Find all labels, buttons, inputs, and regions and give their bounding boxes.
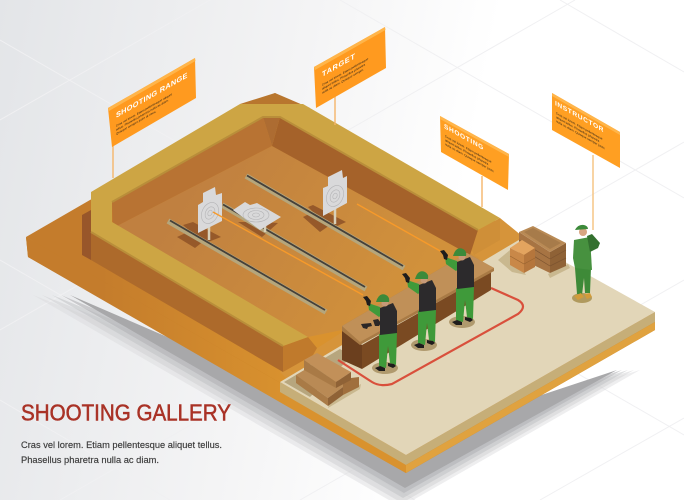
sign: shooting: nulla ac diam. Quisque semper justo.: [445, 142, 494, 174]
inner wall corner facet: [263, 117, 280, 146]
sign: shooting: Cras vel lorem. Etiam pellentesque: [445, 134, 492, 164]
shooting counter: [342, 253, 494, 369]
title: SHOOTING GALLERY: [21, 400, 231, 426]
soldier 1: [363, 294, 398, 374]
sign: shooting range: SHOOTING RANGE: [116, 70, 188, 120]
target 2: [233, 202, 281, 232]
sign: shooting range: Cras vel lorem. Etiam pellentesque aliquet: [116, 92, 172, 128]
sign: shooting range: Quisque semper justo at risus.: [116, 109, 156, 136]
sign: instructor: aliquet tellus. Phasellus pharetra: [556, 115, 599, 143]
sign: shooting: [440, 116, 509, 207]
wall top ring: [91, 104, 500, 346]
sign: shooting range: [108, 58, 196, 178]
wall: outer faces: [82, 210, 500, 372]
rail 2: [222, 204, 366, 289]
target 1: [198, 187, 222, 240]
sign: instructor: Cras vel lorem. Etiam pellentesque: [556, 111, 603, 141]
soldier 3: [440, 248, 475, 328]
sign: target: nulla ac diam. Quisque semper.: [322, 67, 364, 95]
laser line 1: [213, 212, 363, 295]
sign: shooting: SHOOTING: [444, 122, 484, 152]
sign: target: aliquet tellus. Phasellus pharetra: [322, 63, 365, 91]
sign: target: TARGET: [322, 51, 355, 79]
sign: instructor: INSTRUCTOR: [555, 99, 604, 134]
description: Phasellus pharetra nulla ac diam.: [21, 455, 159, 465]
inner wall right: [272, 117, 478, 255]
instructor: [572, 225, 600, 303]
pistols on counter: [361, 319, 381, 329]
crates near instructor: [498, 226, 570, 278]
inner wall left: [112, 117, 272, 228]
ground shadow: [33, 295, 640, 500]
sign: instructor: [552, 93, 620, 230]
sign: target: [314, 27, 386, 125]
sign: shooting: aliquet tellus. Phasellus pharetra: [445, 138, 488, 166]
soldier 2: [402, 271, 437, 351]
rail 3: [246, 176, 404, 268]
target 3: [323, 170, 347, 224]
beige slab: [280, 238, 655, 473]
range floor: [113, 146, 480, 337]
sign: instructor: nulla ac diam. Quisque semper justo.: [556, 119, 605, 151]
sign: shooting range: tellus. Phasellus pharetra nulla ac diam.: [116, 98, 169, 132]
red floor line: [338, 288, 523, 385]
laser line 2: [357, 204, 442, 252]
crates at counter: [296, 353, 361, 408]
target shadows: [177, 205, 346, 248]
sign: target: Cras vel lorem. Etiam pellentesque: [322, 57, 368, 87]
description: [21, 440, 222, 465]
orange ground strip: [280, 218, 540, 392]
platform base: [26, 93, 655, 473]
description: Cras vel lorem. Etiam pellentesque aliquet tellus.: [21, 440, 222, 450]
rail 1: [168, 220, 326, 312]
